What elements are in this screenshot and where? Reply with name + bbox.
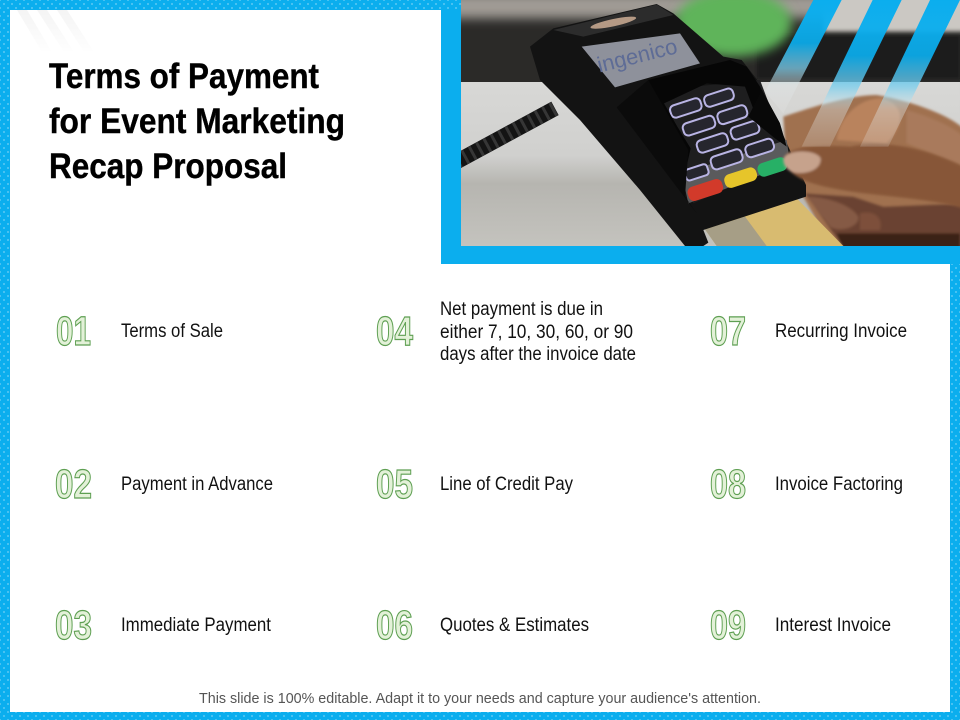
coiled cable [457,108,555,162]
photo background [461,0,960,82]
terminal body [530,4,806,246]
photo frame [441,10,960,264]
item 04: net payment [376,299,636,365]
terminal screen with brand name [582,33,700,87]
title: Terms of Payment [49,57,319,96]
item 06: quotes and estimates: Quotes & Estimates [440,615,589,636]
item 05: line of credit pay [376,461,573,507]
item 02: payment in advance: 02 [55,461,92,507]
item 03: immediate payment: 03 [55,602,92,648]
item 01: terms of sale [56,308,223,354]
item 04: net payment: days after the invoice date [440,344,636,365]
item 04: net payment: Net payment is due in [440,299,603,320]
item 08: invoice factoring [710,461,903,507]
panel: title background [10,10,441,264]
item 08: invoice factoring: Invoice Factoring [775,474,903,495]
item 01: terms of sale: Terms of Sale [121,321,223,342]
item 05: line of credit pay: 05 [376,461,413,507]
shiny keypad cover [648,60,780,162]
item 07: recurring invoice [710,308,907,354]
translucent blue stripes [765,0,960,147]
item 06: quotes and estimates [376,602,589,648]
item 03: immediate payment: Immediate Payment [121,615,272,636]
title: Recap Proposal [49,147,287,186]
photo: card payment terminal: ingenico [594,34,680,78]
item 09: interest invoice: 09 [710,602,746,648]
thumb [783,144,960,208]
item 08: invoice factoring: 08 [710,461,746,507]
item 07: recurring invoice: 07 [710,308,746,354]
keypad [669,87,775,181]
title: for Event Marketing [49,102,345,141]
decorative corner stripes [17,10,94,52]
function keys [688,179,724,201]
item 09: interest invoice [710,602,891,648]
footer note: This slide is 100% editable. Adapt it to your needs and capture your audience's attention. [199,690,761,707]
item 01: terms of sale: 01 [56,308,91,354]
panel: payment terms background [10,264,950,712]
item 03: immediate payment [55,602,272,648]
photo: card payment terminal [447,0,960,250]
gold card [705,197,843,246]
keypad panel [664,80,780,203]
item 04: net payment: 04 [376,308,413,354]
item 09: interest invoice: Interest Invoice [775,615,891,636]
item 06: quotes and estimates: 06 [376,602,413,648]
title [49,57,345,186]
item 02: payment in advance [55,461,273,507]
item 05: line of credit pay: Line of Credit Pay [440,474,573,495]
item 02: payment in advance: Payment in Advance [121,474,273,495]
item 04: net payment: either 7, 10, 30, 60, or 90 [440,322,633,343]
item 07: recurring invoice: Recurring Invoice [775,321,907,342]
hand [783,95,960,250]
